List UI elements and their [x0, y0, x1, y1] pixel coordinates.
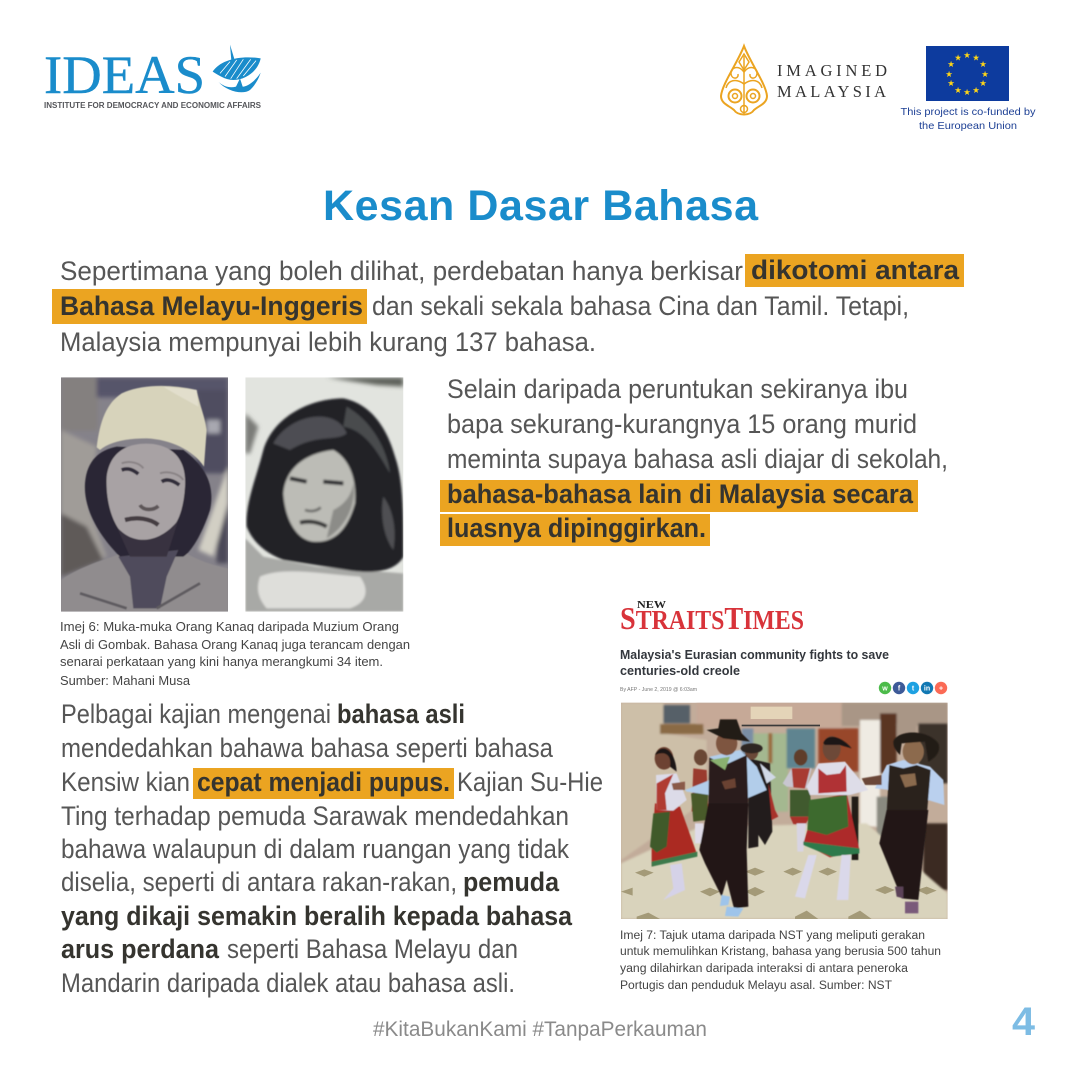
- caption: image 6: senarai perkataan yang kini hanya merangkumi 34 item.: [60, 654, 383, 669]
- text block: intro paragraph: [52, 254, 964, 357]
- text block: left paragraph: bahawa walaupun di dalam ruangan yang tidak: [61, 834, 569, 864]
- center boy: [685, 750, 767, 800]
- floor: [621, 823, 948, 919]
- logo: EU flag: ★: [963, 87, 971, 97]
- text block: left paragraph: [61, 699, 603, 998]
- article headline: [620, 648, 889, 678]
- social share icons: t: [912, 686, 915, 692]
- social share icons: in: [924, 686, 930, 692]
- caption: image 6: Sumber: Mahani Musa: [60, 673, 191, 688]
- text block: left paragraph: Pelbagai kajian mengenai: [61, 699, 331, 729]
- text block: left paragraph: Kensiw kian: [61, 767, 190, 797]
- logo: Imagined Malaysia: [721, 46, 887, 114]
- logo: EU flag: ★: [963, 50, 971, 60]
- social share icons: f: [898, 686, 901, 692]
- caption: image 7: yang dilahirkan daripada interaksi di antara peneroka: [620, 963, 909, 975]
- article headline: centuries-old creole: [620, 664, 740, 678]
- text block: intro paragraph: dikotomi antara: [751, 255, 960, 285]
- caption: image 7: Imej 7: Tajuk utama daripada NST yang meliputi gerakan: [620, 930, 925, 942]
- logo: EU flag: ★: [979, 59, 987, 69]
- logo: EU flag: ★: [947, 78, 955, 88]
- logo: New Straits Times: STRAITSTIMES: [620, 600, 804, 636]
- logo: EU flag: ★: [954, 52, 962, 62]
- title: Kesan Dasar Bahasa: [323, 182, 759, 230]
- article headline: Malaysia's Eurasian community fights to save: [620, 648, 889, 662]
- logo: EU flag: ★: [972, 52, 980, 62]
- text block: left paragraph: Kajian Su-Hie: [457, 767, 603, 797]
- center girl: [803, 793, 859, 857]
- logo: EU flag: ★: [945, 69, 953, 79]
- caption: image 7: [620, 930, 941, 992]
- footer hashtags: #KitaBukanKami #TanpaPerkauman: [373, 1018, 707, 1041]
- logo: EU flag: ★: [981, 69, 989, 79]
- photo: Orang Kanaq man: [61, 377, 228, 612]
- logo: EU flag: ★: [972, 85, 980, 95]
- text block: left paragraph: seperti Bahasa Melayu dan: [227, 934, 518, 964]
- text block: left paragraph: mendedahkan bahawa bahasa seperti bahasa: [61, 733, 554, 763]
- text block: left paragraph: bahasa asli: [337, 699, 465, 729]
- logo: IDEAS: IDEAS: [44, 45, 205, 105]
- text: EU co-funding note: the European Union: [919, 120, 1017, 132]
- logo: EU flag: ★: [979, 78, 987, 88]
- text block: right paragraph: meminta supaya bahasa asli diajar di sekolah,: [447, 444, 948, 474]
- caption: image 7: untuk memulihkan Kristang, bahasa yang berusia 500 tahun: [620, 946, 941, 958]
- text block: left paragraph: Mandarin daripada dialek atau bahasa asli.: [61, 968, 515, 998]
- text block: left paragraph: cepat menjadi pupus.: [197, 767, 450, 797]
- logo: EU flag: ★: [954, 85, 962, 95]
- text block: left paragraph: Ting terhadap pemuda Sarawak mendedahkan: [61, 801, 569, 831]
- text: EU co-funding note: This project is co-funded by: [900, 106, 1036, 118]
- text block: intro paragraph: Sepertimana yang boleh dilihat, perdebatan hanya berkisar: [60, 256, 743, 286]
- icon: IDEAS bird: [213, 45, 261, 92]
- photo: Orang Kanaq woman: [245, 377, 403, 612]
- text block: right paragraph: [440, 374, 948, 546]
- social share icons: +: [939, 686, 943, 692]
- logo: Imagined Malaysia: IMAGINED: [777, 61, 887, 80]
- social share icons: [879, 682, 947, 694]
- logo: EU flag: [926, 46, 1009, 101]
- logo: IDEAS: [44, 45, 262, 110]
- text block: right paragraph: bahasa-bahasa lain di Malaysia secara: [447, 479, 914, 509]
- left girl: [652, 803, 697, 867]
- social share icons: w: [881, 686, 888, 692]
- logo: Imagined Malaysia: MALAYSIA: [777, 82, 886, 101]
- caption: image 6: [60, 619, 410, 688]
- text block: right paragraph: luasnya dipinggirkan.: [447, 513, 706, 543]
- caption: image 7: Portugis dan penduduk Melayu asal. Sumber: NST: [620, 980, 892, 992]
- logo: EU flag: ★: [947, 59, 955, 69]
- text block: left paragraph: diselia, seperti di antara rakan-rakan,: [61, 867, 457, 897]
- logo: IDEAS: INSTITUTE FOR DEMOCRACY AND ECONOMIC AFFAIRS: [44, 101, 262, 110]
- text block: left paragraph: arus perdana: [61, 934, 220, 964]
- text block: intro paragraph: Malaysia mempunyai lebih kurang 137 bahasa.: [60, 327, 596, 357]
- text block: left paragraph: pemuda: [463, 867, 560, 897]
- photo: Kristang dancers: [621, 703, 948, 919]
- text block: intro paragraph: Bahasa Melayu-Inggeris: [60, 291, 363, 321]
- back dancers: [748, 758, 772, 848]
- panel: New Straits Times article: [620, 599, 948, 992]
- logo: New Straits Times: NEW: [637, 599, 666, 611]
- caption: image 6: Imej 6: Muka-muka Orang Kanaq daripada Muzium Orang: [60, 619, 399, 634]
- text: EU co-funding note: [900, 106, 1036, 132]
- text block: right paragraph: bapa sekurang-kurangnya 15 orang murid: [447, 409, 917, 439]
- text block: intro paragraph: dan sekali sekala bahasa Cina dan Tamil. Tetapi,: [372, 291, 909, 321]
- text block: left paragraph: yang dikaji semakin beralih kepada bahasa: [61, 901, 573, 931]
- caption: image 6: Asli di Gombak. Bahasa Orang Kanaq juga terancam dengan: [60, 637, 410, 652]
- article byline: By AFP - June 2, 2019 @ 6:03am: [620, 687, 697, 693]
- text block: right paragraph: Selain daripada peruntukan sekiranya ibu: [447, 374, 908, 404]
- icon: gold wayang: [721, 46, 767, 114]
- page number: 4: [1012, 1000, 1036, 1044]
- right boy: [875, 760, 944, 805]
